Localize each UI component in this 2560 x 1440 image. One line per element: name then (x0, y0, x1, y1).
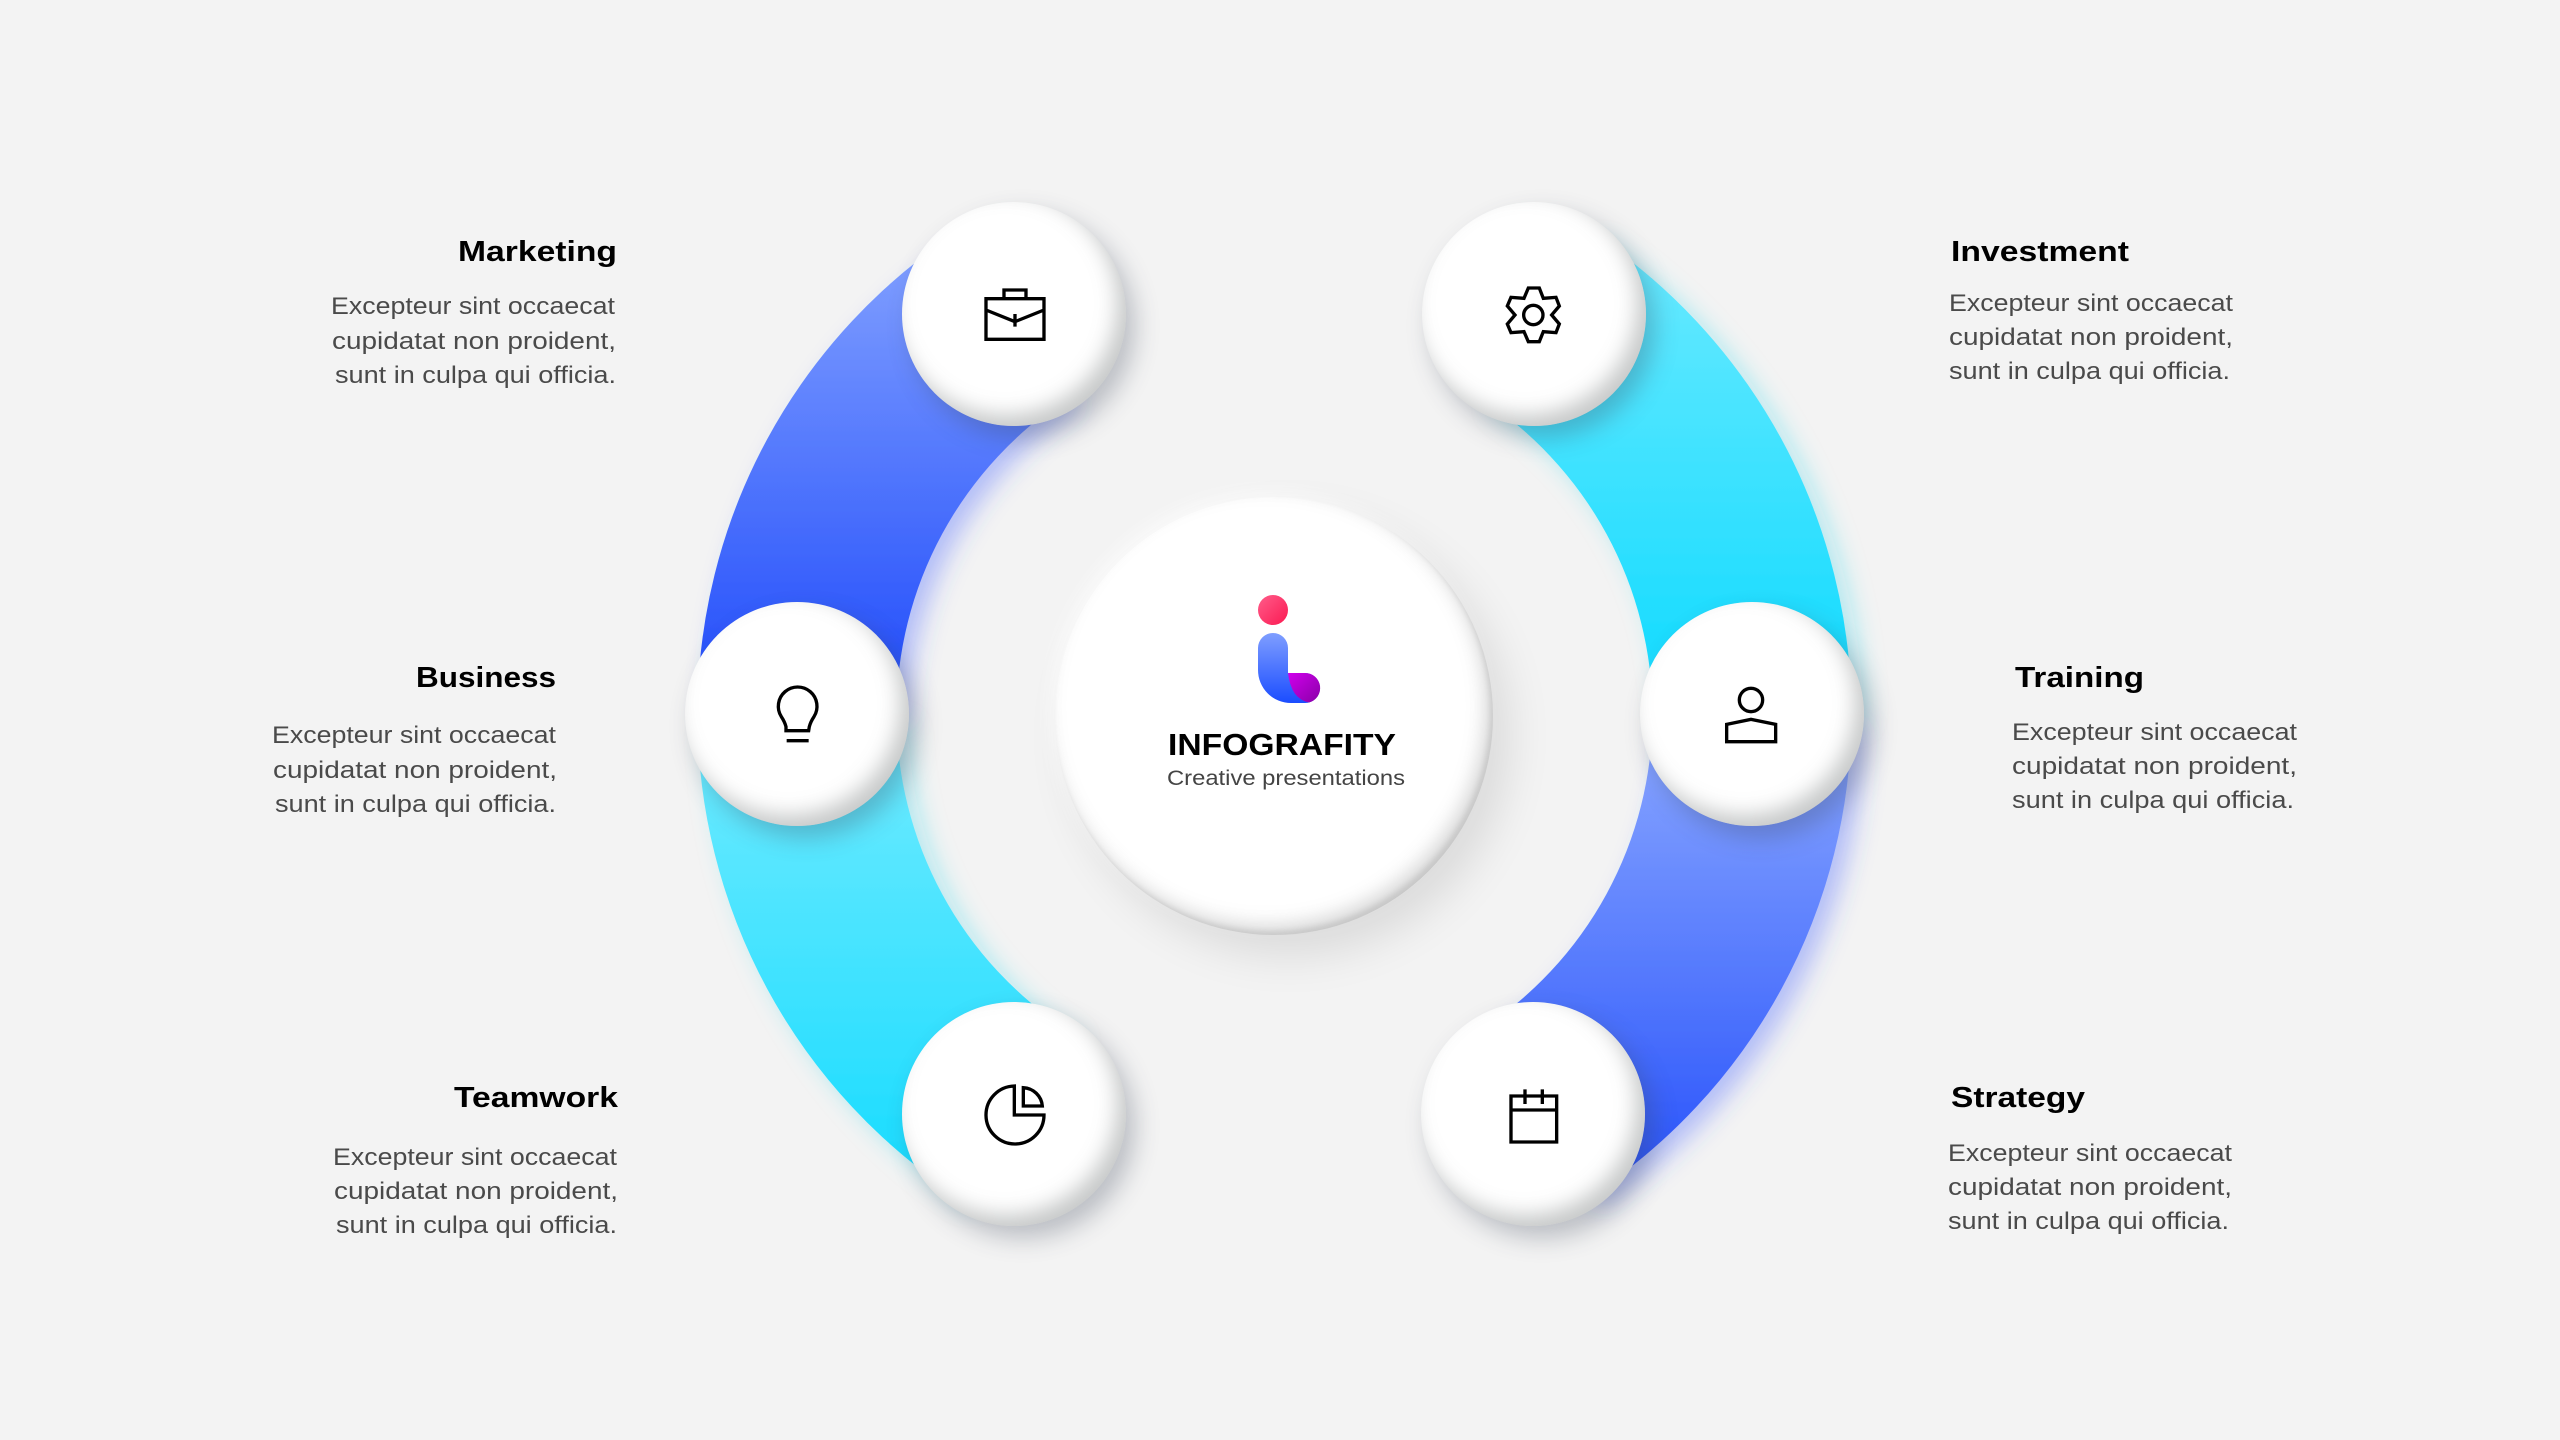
label: Strategy: cupidatat non proident, (1948, 1174, 2232, 1201)
node: Marketing with briefcase icon (902, 202, 1126, 426)
node: Business with light bulb icon (685, 602, 909, 826)
label: Strategy: Strategy (1951, 1082, 2085, 1114)
node: Strategy with calendar icon (1421, 1002, 1645, 1226)
arc: marketing to business (blue) (797, 314, 1014, 714)
label: Business: Excepteur sint occaecat (272, 722, 556, 749)
label: Business: Business (416, 662, 556, 694)
label: Training: Excepteur sint occaecat (2012, 719, 2297, 746)
label: Teamwork: cupidatat non proident, (334, 1178, 618, 1205)
label: Training: cupidatat non proident, (2012, 753, 2297, 780)
logo letter stem (1258, 633, 1320, 703)
label: Investment: cupidatat non proident, (1949, 324, 2233, 351)
label: Teamwork (333, 1082, 619, 1239)
wordmark: INFOGRAFITY (1168, 727, 1396, 762)
center hub circle (1055, 497, 1493, 935)
label: Marketing: Excepteur sint occaecat (331, 293, 615, 320)
label: Teamwork: sunt in culpa qui officia. (336, 1212, 617, 1239)
arc: investment to training (cyan) (1534, 314, 1752, 714)
label: Strategy (1948, 1082, 2232, 1235)
logo dot (1258, 595, 1288, 625)
label: Strategy: Excepteur sint occaecat (1948, 1140, 2232, 1167)
logo purple foot (1288, 673, 1320, 702)
label: Marketing (331, 236, 617, 389)
node: Teamwork with pie chart icon (902, 1002, 1126, 1226)
label: Business: sunt in culpa qui officia. (275, 791, 556, 818)
label: Training (2012, 662, 2297, 814)
label: Strategy: sunt in culpa qui officia. (1948, 1208, 2229, 1235)
label: Investment: Excepteur sint occaecat (1949, 290, 2233, 317)
label: Training: sunt in culpa qui officia. (2012, 787, 2294, 814)
label: Marketing: sunt in culpa qui officia. (335, 362, 616, 389)
arc: training to strategy (blue) (1534, 714, 1752, 1114)
label: Marketing: Marketing (458, 236, 617, 268)
label: Investment: sunt in culpa qui officia. (1949, 358, 2230, 385)
label: Business: cupidatat non proident, (273, 757, 557, 784)
label: Business (272, 662, 557, 818)
label: Teamwork: Teamwork (454, 1082, 619, 1114)
label: Teamwork: Excepteur sint occaecat (333, 1144, 617, 1171)
node: Training with person icon (1640, 602, 1864, 826)
tagline: Creative presentations (1167, 767, 1405, 790)
label: Training: Training (2015, 662, 2144, 694)
node: Investment with gear icon (1422, 202, 1646, 426)
label: Investment (1949, 236, 2233, 385)
arc: business to teamwork (cyan) (797, 714, 1014, 1114)
label: Marketing: cupidatat non proident, (332, 328, 616, 355)
label: Investment: Investment (1951, 236, 2129, 268)
